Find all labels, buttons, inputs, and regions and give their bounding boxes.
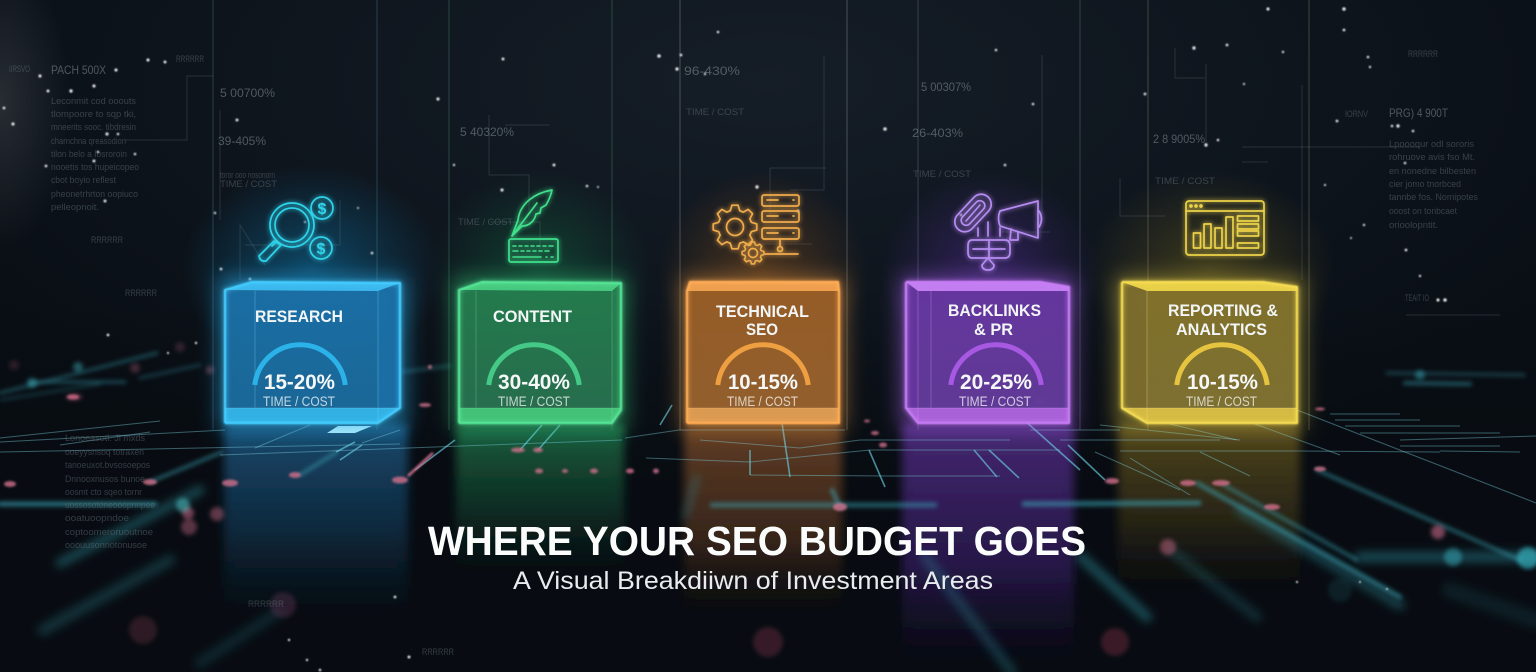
ghost text: column figures: 5 40320%	[460, 125, 514, 139]
gauge arc	[951, 345, 1041, 385]
ghost text: bottom-left notes: uossosotoneooopnnpee	[65, 500, 155, 510]
ghost text: right notes: ooost on tonbcaet	[1389, 206, 1457, 216]
caption: TIME / COST	[727, 393, 798, 409]
ghost text: bottom-left notes: coptoomeroruoutnoe	[65, 527, 153, 537]
ghost text: column figures: TIME / COST	[686, 107, 745, 117]
gauge arc	[1177, 345, 1267, 385]
ghost text: column figures: toror ooo nosonorn	[220, 170, 275, 180]
gauge arc	[489, 345, 579, 385]
ghost text: bottom-left notes: ooatuoopndoe	[65, 513, 129, 523]
ghost text: column figures: 5 00307%	[921, 80, 971, 94]
ghost text: right notes: PRG) 4 900T	[1389, 106, 1449, 120]
ghost text: column figures	[218, 64, 1216, 227]
ghost text: column figures: TIME / COST	[458, 217, 514, 227]
floor wide blurred streaks	[43, 477, 1536, 672]
box glow	[900, 277, 1075, 429]
ghost text: column figures: 5 00700%	[220, 86, 275, 100]
ghost text: right notes: IORNV	[1345, 109, 1368, 119]
ghost text: right notes	[1345, 49, 1478, 303]
column light glows	[182, 165, 1335, 375]
ghost text: left notes: pheonetrhrton oopiuco	[51, 189, 138, 199]
ghost text: column figures: TIME / COST	[913, 169, 972, 179]
ghost text: left notes: pelleopnoit.	[51, 202, 99, 212]
icon: magnifier with dollar coins: $	[318, 201, 327, 218]
heading: technical seo: SEO	[746, 320, 778, 339]
panel: content	[453, 190, 626, 429]
panel: backlinks and pr	[900, 190, 1075, 429]
caption: TIME / COST	[263, 393, 335, 409]
ghost text: right notes: en nonedne bilbesten	[1389, 166, 1476, 176]
ghost text: column figures: TIME / COST	[1155, 176, 1216, 186]
subtitle: A Visual Breakdiiwn of Investment Areas	[513, 567, 993, 595]
heading: reporting and analytics	[1168, 301, 1278, 339]
floor colour reflections	[224, 424, 1300, 664]
gauge arc	[718, 345, 808, 385]
ghost text: left notes: tilon belo a Ibsroroin	[51, 149, 127, 159]
heading: reporting and analytics: REPORTING &	[1168, 301, 1278, 320]
ghost text: bottom-left notes: ooouusonnotonusoe	[65, 540, 147, 550]
panel: research	[219, 197, 406, 429]
panel: reporting and analytics	[1116, 201, 1303, 429]
icon: gears and server stack	[713, 195, 799, 264]
glass box	[225, 282, 400, 423]
ghost text: left notes: RRRRRR	[91, 235, 123, 245]
heading: content: CONTENT	[493, 307, 573, 326]
ghost text: bottom-left notes: RRRRRR	[422, 647, 454, 657]
ghost text: bottom-left notes: RRRRRR	[248, 599, 284, 609]
icon: analytics dashboard window	[1186, 201, 1264, 255]
ghost text: left notes: tlompoore to sqp tki,	[51, 109, 136, 119]
ghost text: bottom-left notes: tanoeuxot.bvsosoepos	[65, 460, 150, 470]
caption: TIME / COST	[498, 393, 570, 409]
ghost text: bottom-left notes	[65, 433, 454, 657]
box glow	[219, 277, 406, 429]
ghost text: column figures: 96-430%	[684, 64, 740, 78]
ghost text: left notes: Leconmit cod ooouts	[51, 96, 137, 106]
ghost text: bottom-left notes: ooeyysnsoq totraxen	[65, 447, 144, 457]
bright floor tile	[327, 426, 372, 433]
ghost text: right notes: rohruove avis fso Mt.	[1389, 152, 1475, 162]
ghost text: left notes: cbot boyio reflest	[51, 175, 116, 185]
ghost text: right notes: TEAIT IO	[1405, 293, 1429, 303]
ghost text: right notes: RRRRRR	[1408, 49, 1438, 59]
box glow	[1116, 277, 1303, 429]
ghost text: bottom-left notes: Lonoeasotl. Ji mxds	[65, 433, 145, 443]
value: 10-15%: 10-15%	[728, 371, 798, 394]
ghost text: column figures: 2 8 9005%	[1153, 132, 1205, 146]
ghost text: left notes: charnchna qreasodion	[51, 136, 126, 146]
floor bright cyan dashes	[336, 405, 1105, 487]
background schematic lines	[125, 48, 1500, 320]
blurred floor bokeh	[9, 342, 1536, 657]
value: 10-15%: 10-15%	[1187, 371, 1258, 394]
icon: magnifier with dollar coins: $	[317, 241, 326, 258]
caption: TIME / COST	[959, 393, 1031, 409]
ghost text: left notes: IIRSVO	[9, 64, 30, 74]
icon: magnifier with dollar coins	[259, 197, 333, 261]
ghost text: bottom-left notes: oosmt cto sqeo tornr	[65, 487, 142, 497]
ghost text: left notes: RRRRRR	[125, 288, 157, 298]
ghost text: right notes: orioolopntit.	[1389, 220, 1438, 230]
column vertical lines	[213, 0, 1309, 430]
box glow	[681, 277, 845, 429]
gauge arc	[255, 345, 345, 385]
icon: chain link, megaphone and press	[951, 190, 1042, 270]
heading: backlinks and pr: BACKLINKS	[948, 301, 1041, 320]
ghost text: column figures: 26-403%	[912, 126, 963, 140]
ghost text: left notes: nooetis tos hupeicopeo	[51, 162, 139, 172]
value: 20-25%: 20-25%	[960, 371, 1032, 394]
ghost text: right notes: cier jomo tnorbced	[1389, 179, 1461, 189]
ghost text: left notes: RRRRRR	[176, 54, 204, 64]
glass box	[1122, 282, 1297, 423]
ghost text: right notes: tannbe fos. Nomipotes	[1389, 192, 1478, 202]
heading: technical seo	[716, 302, 809, 339]
ghost text: left notes: PACH 500X	[51, 63, 106, 77]
ghost text: left notes: mneerits sooc. tibdresin	[51, 122, 136, 132]
glass box	[687, 282, 839, 423]
caption: TIME / COST	[1186, 393, 1257, 409]
value: 30-40%: 30-40%	[498, 371, 570, 394]
icon: feather and keyboard	[509, 190, 558, 262]
ghost text: bottom-left notes: Dnnooxnusos bunoe	[65, 474, 145, 484]
floor thin circuit lines	[0, 410, 1536, 503]
ghost text: column figures: 39-405%	[218, 134, 266, 148]
pink floor nodes	[4, 365, 1326, 511]
heading: backlinks and pr	[948, 301, 1041, 339]
ghost text: left notes	[9, 54, 204, 298]
glass box	[906, 282, 1069, 423]
floor medium streaks	[0, 353, 1524, 597]
glass box	[459, 282, 621, 423]
value: 15-20%: 15-20%	[264, 371, 335, 394]
heading: reporting and analytics: ANALYTICS	[1176, 320, 1267, 339]
heading: backlinks and pr: & PR	[974, 320, 1013, 339]
ghost text: right notes: Lpoooqur odl sororis	[1389, 139, 1475, 149]
box glow	[453, 277, 626, 429]
panel: technical seo	[681, 195, 845, 429]
title: WHERE YOUR SEO BUDGET GOES	[428, 518, 1086, 564]
heading: technical seo: TECHNICAL	[716, 302, 809, 321]
heading: research: RESEARCH	[255, 307, 343, 326]
ghost text: column figures: TIME / COST	[220, 179, 278, 189]
